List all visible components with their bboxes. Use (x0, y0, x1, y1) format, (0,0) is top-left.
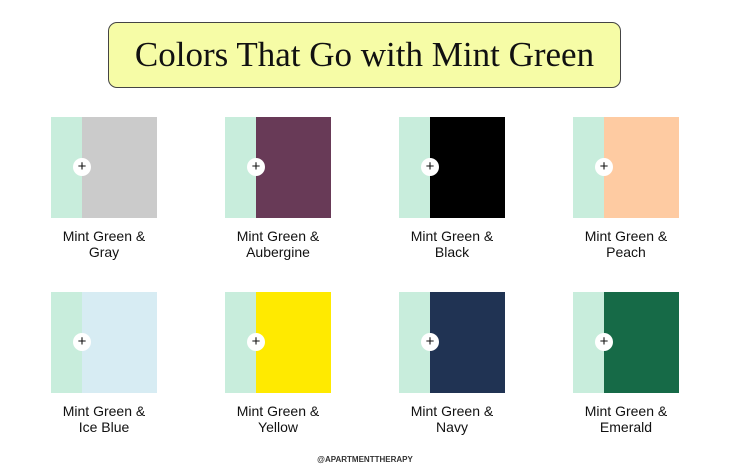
panel: ice blue: Mint Green & (63, 403, 145, 419)
title (108, 22, 621, 88)
panel: black: Mint Green & (411, 228, 493, 244)
panel: navy (399, 292, 505, 435)
panel: ice blue: + (78, 333, 86, 350)
footer credit: @APARTMENTTHERAPY (317, 455, 413, 464)
panel: ice blue: Ice Blue (79, 418, 129, 434)
panel: ice blue (51, 292, 157, 434)
panel: yellow: + (252, 333, 260, 350)
panel: yellow: Mint Green & (237, 403, 319, 419)
panel: gray: + (78, 158, 86, 175)
panel: aubergine: Aubergine (246, 244, 310, 260)
panel: navy: + (426, 333, 434, 350)
panel: black (399, 117, 505, 260)
panel: emerald: Emerald (600, 418, 652, 434)
title: Colors That Go with Mint Green (135, 35, 594, 74)
panel: navy: Mint Green & (411, 403, 493, 419)
panel: emerald (573, 292, 679, 434)
panel: gray (51, 117, 157, 260)
panel: peach: Peach (606, 244, 646, 260)
panel: emerald: + (600, 333, 608, 350)
panel: aubergine (225, 117, 331, 260)
panel: peach (573, 117, 679, 260)
panel: yellow: Yellow (258, 418, 298, 434)
panel: navy: Navy (436, 418, 468, 434)
panel: gray: Mint Green & (63, 228, 145, 244)
panel: peach: + (600, 158, 608, 175)
panel: black: + (426, 158, 434, 175)
panel: gray: Gray (89, 244, 119, 260)
panel: black: Black (435, 244, 469, 260)
panel: peach: Mint Green & (585, 228, 667, 244)
panel: yellow (225, 292, 331, 434)
panel: emerald: Mint Green & (585, 403, 667, 419)
panel: aubergine: Mint Green & (237, 228, 319, 244)
panel: aubergine: + (252, 158, 260, 175)
